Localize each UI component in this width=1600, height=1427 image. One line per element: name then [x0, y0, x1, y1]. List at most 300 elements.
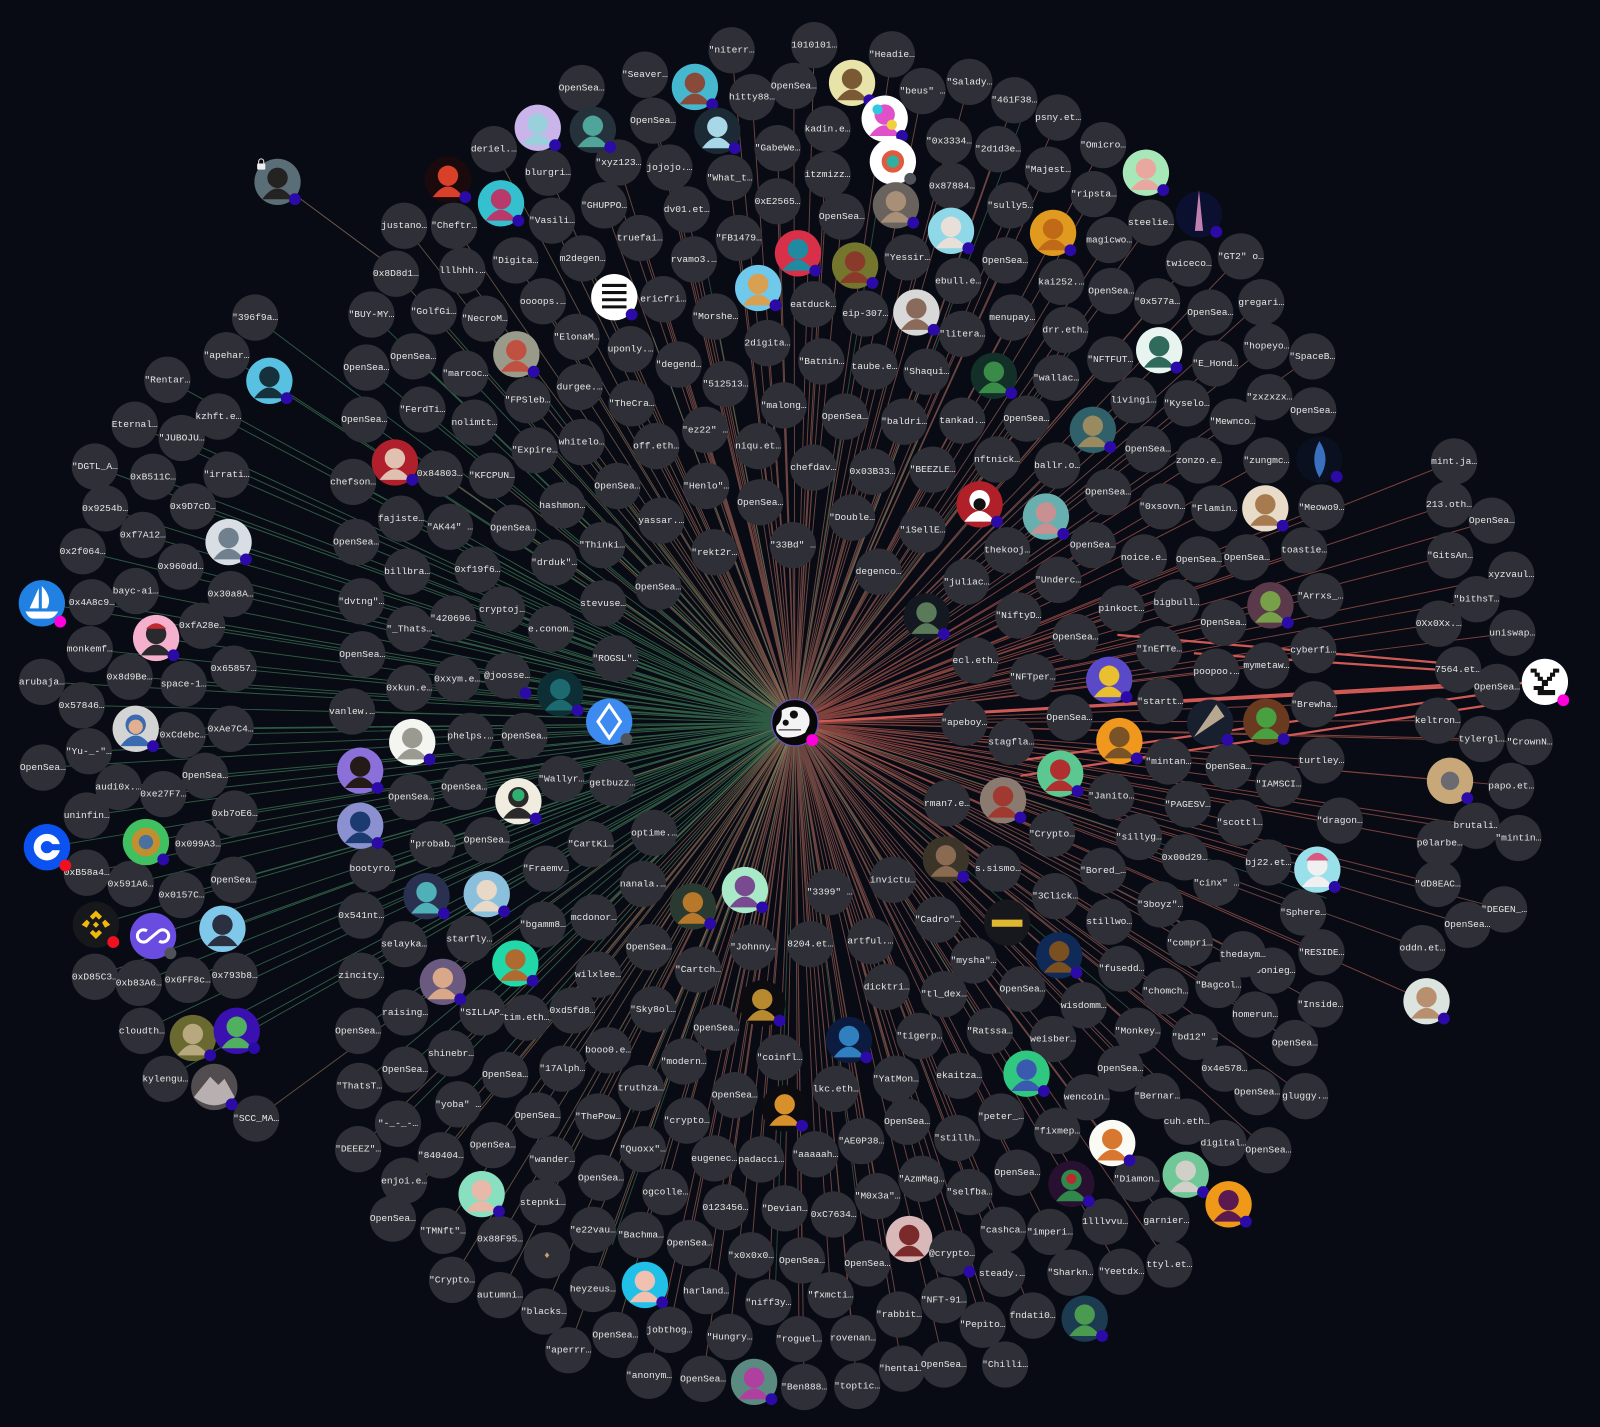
node: 0xE2565 [754, 178, 801, 224]
edges: green links among top and bottom nodes [612, 123, 1327, 1286]
node: heyzeus [570, 1266, 616, 1312]
node: NiftyD: "NiftyD… [995, 610, 1042, 621]
node: 0xf19f6: 0xf19f6… [455, 564, 501, 575]
node: bootyro [349, 845, 396, 892]
node: 0Xx0Xx: 0Xx0Xx.… [1416, 618, 1462, 629]
node: garnier: garnier… [1143, 1215, 1190, 1226]
node: itzmizz: itzmizz… [805, 169, 851, 180]
node: IAMSCI [1255, 761, 1302, 807]
node: 0x8d9Be [106, 654, 153, 700]
node: OpenSea [1245, 1127, 1292, 1173]
node: bd12: "bd12" … [1172, 1031, 1218, 1042]
node: OpenSea [441, 764, 488, 810]
node: OpenSea: OpenSea… [515, 1110, 561, 1121]
node: kai252: kai252.… [1038, 276, 1084, 287]
node: OpenSea [1097, 1045, 1144, 1092]
node: OpenSea [339, 631, 385, 677]
node: 0x8d9Be: 0x8d9Be… [107, 671, 153, 682]
node: 0xxym: 0xxym.e… [434, 673, 480, 684]
node: menupay: menupay… [989, 312, 1035, 323]
node: 0xf7A12: 0xf7A12… [120, 529, 166, 540]
node: psny [1035, 94, 1081, 141]
node: OpenSea [594, 463, 641, 509]
node: 0x03B33 [849, 448, 896, 495]
node: Vasili: "Vasili… [529, 215, 575, 226]
node: 0Xx0Xx [1416, 601, 1462, 647]
node: crypto handle: @crypto… [929, 1248, 975, 1259]
node: crypto handle [929, 1230, 975, 1278]
node: OpenSea [921, 1341, 967, 1388]
node: OpenSea [1200, 600, 1247, 646]
node: vanlew [329, 688, 375, 735]
node: artful [847, 918, 894, 964]
node: NecroM: "NecroM… [462, 313, 508, 324]
node: 0xkun: 0xkun.e… [386, 682, 432, 693]
node: 0xAe7C4 [207, 706, 254, 752]
node: dashes [375, 1101, 421, 1147]
node: OpenSea: OpenSea… [578, 1172, 624, 1183]
node: 8204 [787, 921, 833, 967]
node: Rentar: "Rentar… [144, 374, 191, 385]
node: OpenSea: OpenSea… [712, 1090, 758, 1101]
node: jobthog: jobthog… [646, 1324, 693, 1335]
avatar: blue diamond [586, 698, 632, 745]
node: Bachma: "Bachma… [618, 1229, 664, 1240]
node: x0x0x0 [728, 1232, 774, 1278]
node: audi0x [95, 764, 142, 810]
node: Flamin [1191, 485, 1238, 532]
avatar: dark blue logo [826, 1017, 872, 1063]
node: gregari: gregari… [1238, 297, 1284, 308]
node: mymetaw: mymetaw… [1243, 660, 1290, 671]
node: Underc: "Underc… [1035, 574, 1081, 585]
node: padacci: padacci… [738, 1154, 784, 1165]
avatar: dark teal creature [570, 107, 616, 153]
node: Shaqui [903, 348, 950, 395]
node: selfba [946, 1169, 993, 1215]
node: OpenSea: OpenSea… [680, 1373, 726, 1384]
avatar: pixel Y logo [1522, 659, 1569, 706]
node: OpenSea: OpenSea… [592, 1329, 639, 1340]
avatar: blue figure [337, 803, 383, 849]
node: OpenSea [1088, 268, 1134, 314]
node: Crypto: "Crypto… [1029, 828, 1075, 839]
node: modern: "modern… [661, 1056, 707, 1067]
avatar: grey headset [493, 331, 540, 378]
node: malong: "malong… [761, 400, 807, 411]
node: goonieg [1249, 947, 1296, 994]
node: crypto [664, 1097, 710, 1144]
avatar: robot [246, 358, 293, 404]
node: dv01 [664, 186, 710, 233]
node: Ratssa: "Ratssa… [967, 1025, 1013, 1036]
node: hitty88: hitty88… [729, 92, 775, 103]
node: wander [529, 1136, 575, 1183]
avatar: slate person [420, 959, 466, 1005]
node: zonzo: zonzo.e… [1176, 455, 1222, 466]
node: ttyl: ttyl.et… [1146, 1259, 1193, 1270]
node: scottl [1217, 800, 1263, 846]
node: ericfri [640, 276, 687, 322]
node: OpenSea [982, 237, 1028, 284]
node: 0xkun [386, 665, 432, 711]
node: 17Alph [539, 1045, 585, 1092]
node: GT2: "GT2" o… [1218, 251, 1264, 262]
node: stillh [934, 1115, 980, 1161]
node: OpenSea: OpenSea… [1125, 444, 1171, 455]
node: 0xb83A6 [116, 960, 162, 1006]
node: BUY-MY: "BUY-MY… [348, 309, 395, 320]
node: uniswap [1489, 610, 1535, 656]
node: Headie [869, 31, 915, 77]
node: OpenSea [335, 1008, 381, 1054]
node: gregari [1238, 279, 1284, 325]
node: Kyselo [1164, 380, 1210, 426]
node: Bernar: "Bernar… [1134, 1091, 1180, 1102]
avatar: grey man [893, 289, 940, 336]
node: ecl: ecl.eth… [953, 655, 999, 666]
node: imperi [1027, 1209, 1073, 1255]
node: 2digita [744, 320, 791, 366]
node: zungmc: "zungmc… [1243, 455, 1290, 466]
node: joosse [484, 653, 531, 699]
node: Crypto [429, 1257, 475, 1303]
node: 2digita: 2digita… [744, 338, 791, 349]
node: kadin: kadin.e… [805, 123, 851, 134]
node: Inside: "Inside… [1297, 999, 1344, 1010]
node: OpenSea [680, 1356, 726, 1402]
node: 396f9a [232, 294, 278, 341]
avatar: pokeball [956, 481, 1003, 528]
node: nanala [620, 861, 666, 907]
node: Salady [946, 59, 993, 105]
node: 1010101 [791, 22, 838, 68]
node: s.sismo: s.sismo… [975, 863, 1021, 874]
node: nolimtt [451, 400, 498, 446]
node: chefdav: chefdav… [790, 462, 837, 473]
node: OpenSea [390, 333, 437, 380]
node: off: off.eth… [633, 441, 679, 452]
node: FPSleb: "FPSleb… [505, 395, 551, 406]
node: rvamo3: rvamo3.… [671, 254, 717, 265]
node: NFTFUT: "NFTFUT… [1087, 354, 1133, 365]
node: Ben888: "Ben888… [781, 1381, 827, 1392]
avatar: blue figure [928, 208, 974, 254]
node: zonzo [1176, 437, 1222, 484]
node: GT2 [1218, 233, 1264, 280]
node: Salady: "Salady… [946, 76, 993, 87]
avatar: Binance logo [73, 902, 119, 948]
node: OpenSea [844, 1240, 891, 1287]
node: kzhft [195, 393, 242, 440]
node: 0x88F95: 0x88F95… [477, 1234, 523, 1245]
node: FPSleb [504, 377, 551, 423]
node: OpenSea [819, 193, 865, 240]
node: FB1479 [716, 215, 762, 261]
node: 0xB511C [130, 454, 176, 500]
node: starfly [446, 916, 493, 962]
avatar: red hair [372, 439, 418, 486]
node: Bored_: "Bored_… [1080, 865, 1126, 876]
node: bgamm8: "bgamm8… [520, 919, 566, 930]
node: Meowo9: "Meowo9… [1298, 502, 1345, 513]
node: mintin [1495, 815, 1542, 861]
avatar: blue ape [113, 706, 159, 752]
node: raising: raising… [382, 1007, 428, 1018]
node: stevuse [580, 580, 626, 626]
node: steelie: steelie… [1128, 217, 1174, 228]
node: OpenSea [388, 774, 434, 820]
node: TMNft [420, 1208, 466, 1254]
node: selayka [381, 921, 427, 967]
node: crypto: "crypto… [664, 1115, 710, 1126]
node: Diamon [1114, 1156, 1160, 1202]
node: Diamon: "Diamon… [1114, 1173, 1160, 1184]
node: heyzeus: heyzeus… [570, 1284, 616, 1295]
node: 3boyz: "3boyz"… [1137, 899, 1183, 910]
node: dvtng [338, 578, 384, 624]
node: chomch [1142, 968, 1189, 1014]
node: 0xxym [434, 656, 480, 702]
node: pinkoct: pinkoct… [1098, 603, 1145, 614]
node: eip-307 [842, 290, 889, 337]
node: baldri [881, 398, 927, 445]
node: NFTper [1009, 654, 1056, 700]
edges: thick red links to the right [795, 635, 1545, 776]
node: Omicro [1080, 122, 1126, 168]
avatar: pepe brown [1247, 582, 1294, 629]
node: 0xB58a4 [64, 850, 110, 896]
avatar: orange and dark [1205, 1181, 1252, 1228]
node: Sky8ol: "Sky8ol… [630, 1004, 676, 1015]
node: apeboy: "apeboy… [941, 717, 988, 728]
avatar: grey-brown ape [873, 182, 919, 229]
node: fndati0: fndati0… [1010, 1310, 1056, 1321]
node: 33Bd [770, 522, 816, 568]
avatar: white and orange [1089, 1120, 1136, 1166]
node: OpenSea: OpenSea… [994, 1167, 1041, 1178]
avatar: tan noise [1427, 758, 1473, 804]
node: autumni: autumni… [477, 1290, 523, 1301]
node: Morshe: "Morshe… [692, 311, 739, 322]
node: apehar [203, 332, 250, 378]
avatar: light streak [1187, 700, 1233, 746]
node: OpenSea [515, 1092, 561, 1139]
node: OpenSea [578, 1155, 624, 1201]
node: OpenSea: OpenSea… [844, 1258, 891, 1269]
node: JUBOJU [158, 415, 205, 461]
node: 0xsovn [1139, 483, 1185, 530]
node: Pepito [959, 1302, 1006, 1348]
node: niff3y [745, 1279, 792, 1325]
node: InEfTe: "InEfTe… [1136, 644, 1182, 655]
node: bgamm8 [520, 902, 566, 948]
node: enjoi [381, 1158, 427, 1204]
node: marcoc: "marcoc… [442, 368, 489, 379]
node: OpenSea: OpenSea… [482, 1069, 528, 1080]
node: OpenSea: OpenSea… [630, 115, 676, 126]
node: ekaitza [936, 1053, 982, 1099]
node: 0xCdebc [159, 712, 206, 758]
node: OpenSea [1272, 1020, 1318, 1066]
node: RESIDE: "RESIDE… [1298, 947, 1345, 958]
node: fixmep: "fixmep… [1034, 1125, 1080, 1136]
node: 0x57846: 0x57846… [59, 700, 105, 711]
node: OpenSea: OpenSea… [626, 942, 672, 953]
node: oddn: oddn.et… [1399, 943, 1446, 954]
node: AK44 [427, 504, 473, 550]
node: OpenSea [182, 753, 228, 799]
node: BEEZLE: "BEEZLE… [910, 464, 956, 475]
node: Double: "Double… [829, 512, 875, 523]
node: SpaceB: "SpaceB… [1289, 351, 1335, 362]
node: invictu: invictu… [870, 874, 916, 885]
node: degenco: degenco… [856, 566, 902, 577]
node: mysha: "mysha"… [950, 955, 997, 966]
node: wencoin: wencoin… [1064, 1092, 1110, 1103]
node: mcdonor [571, 894, 617, 941]
node: audi0x: audi0x.… [95, 781, 142, 792]
node: OpenSea: OpenSea… [182, 770, 228, 781]
node: Bachma [618, 1212, 664, 1258]
node: 0x30a8A: 0x30a8A… [208, 589, 254, 600]
node: uninfin [64, 792, 110, 839]
node: aaaaah: "aaaaah… [792, 1149, 839, 1160]
node: fusedd: "fusedd… [1098, 963, 1145, 974]
node: dragon [1317, 797, 1363, 844]
node: uponly: uponly.… [608, 344, 654, 355]
node: NFT-91: "NFT-91… [921, 1295, 967, 1306]
node: BUY-MY [348, 291, 395, 338]
node: OpenSea: OpenSea… [999, 984, 1046, 995]
node: wencoin [1064, 1074, 1110, 1120]
node: OpenSea: OpenSea… [341, 414, 388, 425]
node: mysha [950, 937, 997, 984]
node: ElonaM: "ElonaM… [554, 331, 600, 342]
node: magicwo [1086, 217, 1132, 263]
node: Seaver [622, 52, 668, 98]
node: 0xB511C: 0xB511C… [130, 471, 176, 482]
node: 0xC7634: 0xC7634… [811, 1209, 857, 1220]
node: bigbull [1153, 579, 1200, 625]
node: OpenSea [994, 1150, 1041, 1196]
node: livingi [1111, 377, 1157, 423]
node: Batnin: "Batnin… [798, 356, 845, 367]
node: irrati [203, 452, 250, 498]
avatar: wizard [903, 593, 950, 640]
node: OpenSea [1224, 534, 1270, 581]
node: CrownN [1506, 719, 1553, 765]
node: rabbit: "rabbit… [876, 1309, 922, 1320]
node: 0x541nt: 0x541nt… [338, 910, 384, 921]
node: monkemf [67, 626, 113, 672]
node: Brewha [1291, 681, 1338, 727]
node: Brewha: "Brewha… [1291, 699, 1338, 710]
node: lllhhh [439, 247, 485, 294]
node: 33Bd: "33Bd" … [770, 540, 816, 551]
node: OpenSea: OpenSea… [390, 351, 437, 362]
node: 0x099A3: 0x099A3… [175, 839, 221, 850]
node: dD8EAC [1415, 861, 1461, 907]
node: Bagcol: "Bagcol… [1195, 979, 1242, 990]
node: 0x87884: 0x87884… [929, 180, 975, 191]
node: aperrr [545, 1327, 592, 1373]
node: small icon: ♦ [544, 1250, 550, 1261]
avatar: black gold warrior [739, 980, 786, 1027]
node: 0xf7A12 [120, 512, 166, 558]
node: Wallyr: "Wallyr… [538, 773, 584, 784]
node: fndati0 [1009, 1292, 1056, 1339]
node: toastie: toastie… [1281, 545, 1327, 556]
node: weisber: weisber… [1030, 1034, 1076, 1045]
node: papo [1488, 763, 1534, 809]
node: Eternal [112, 402, 158, 448]
avatar: dark blue glow [1296, 436, 1343, 483]
node: nftnick: nftnick… [974, 454, 1020, 465]
avatar: purple figure [337, 747, 383, 794]
node: OpenSea [592, 1312, 639, 1358]
node: OpenSea: OpenSea… [667, 1238, 713, 1249]
node: p0larbe: p0larbe… [1417, 838, 1463, 849]
node: ez22 [682, 407, 728, 453]
node: stepnki [520, 1179, 566, 1225]
node: chefdav [790, 444, 837, 491]
node: fxmcti: "fxmcti… [808, 1290, 854, 1301]
node: chomch: "chomch… [1142, 986, 1189, 997]
node: selayka: selayka… [381, 939, 427, 950]
node: drduk: "drduk"… [531, 557, 577, 568]
node: 0xCdebc: 0xCdebc… [160, 729, 206, 740]
node: zungmc [1243, 437, 1290, 484]
node: Quoxx: "Quoxx"… [620, 1144, 666, 1155]
node: 461F38 [991, 77, 1038, 123]
node: ThePow [575, 1093, 621, 1140]
node: noice: noice.e… [1121, 552, 1167, 563]
node: E_Hond [1192, 340, 1239, 387]
avatar: rainbow pixels [862, 95, 908, 142]
node: OpenSea [771, 63, 817, 109]
node: YatMon [873, 1056, 919, 1102]
node: goonieg: goonieg… [1249, 965, 1296, 976]
node: 2d1d3e: "2d1d3e… [975, 144, 1021, 155]
node: sillyg [1116, 814, 1162, 860]
node: Chilli: "Chilli… [982, 1359, 1028, 1370]
node: stagfla [988, 719, 1034, 765]
node: mcdonor: mcdonor… [571, 912, 617, 923]
node: shinebr: shinebr… [428, 1048, 474, 1059]
node: tylergl: tylergl… [1459, 734, 1505, 745]
node: stepnki: stepnki… [520, 1197, 566, 1208]
node: optime [631, 810, 677, 856]
node: s.sismo [975, 845, 1021, 892]
node: xyz123: "xyz123… [595, 157, 642, 168]
node: arubaja: arubaja… [19, 676, 65, 687]
node: 0xAe7C4: 0xAe7C4… [208, 723, 254, 734]
node: Ben888 [781, 1364, 827, 1410]
node: brutali: brutali… [1454, 820, 1500, 831]
node: thekooj: thekooj… [984, 545, 1030, 556]
node: wisdomm: wisdomm… [1061, 1000, 1107, 1011]
node: billbra: billbra… [384, 566, 430, 577]
node: Sphere [1280, 889, 1326, 936]
node: tigerp: "tigerp… [896, 1030, 943, 1041]
node: 0x84803: 0x84803… [417, 468, 463, 479]
node: baldri: "baldri… [881, 416, 927, 427]
node: rovenan [830, 1315, 876, 1361]
node: 0x6FF8c: 0x6FF8c… [165, 974, 211, 985]
node: eatduck [790, 281, 837, 327]
node: gluggy: gluggy.… [1282, 1091, 1328, 1102]
